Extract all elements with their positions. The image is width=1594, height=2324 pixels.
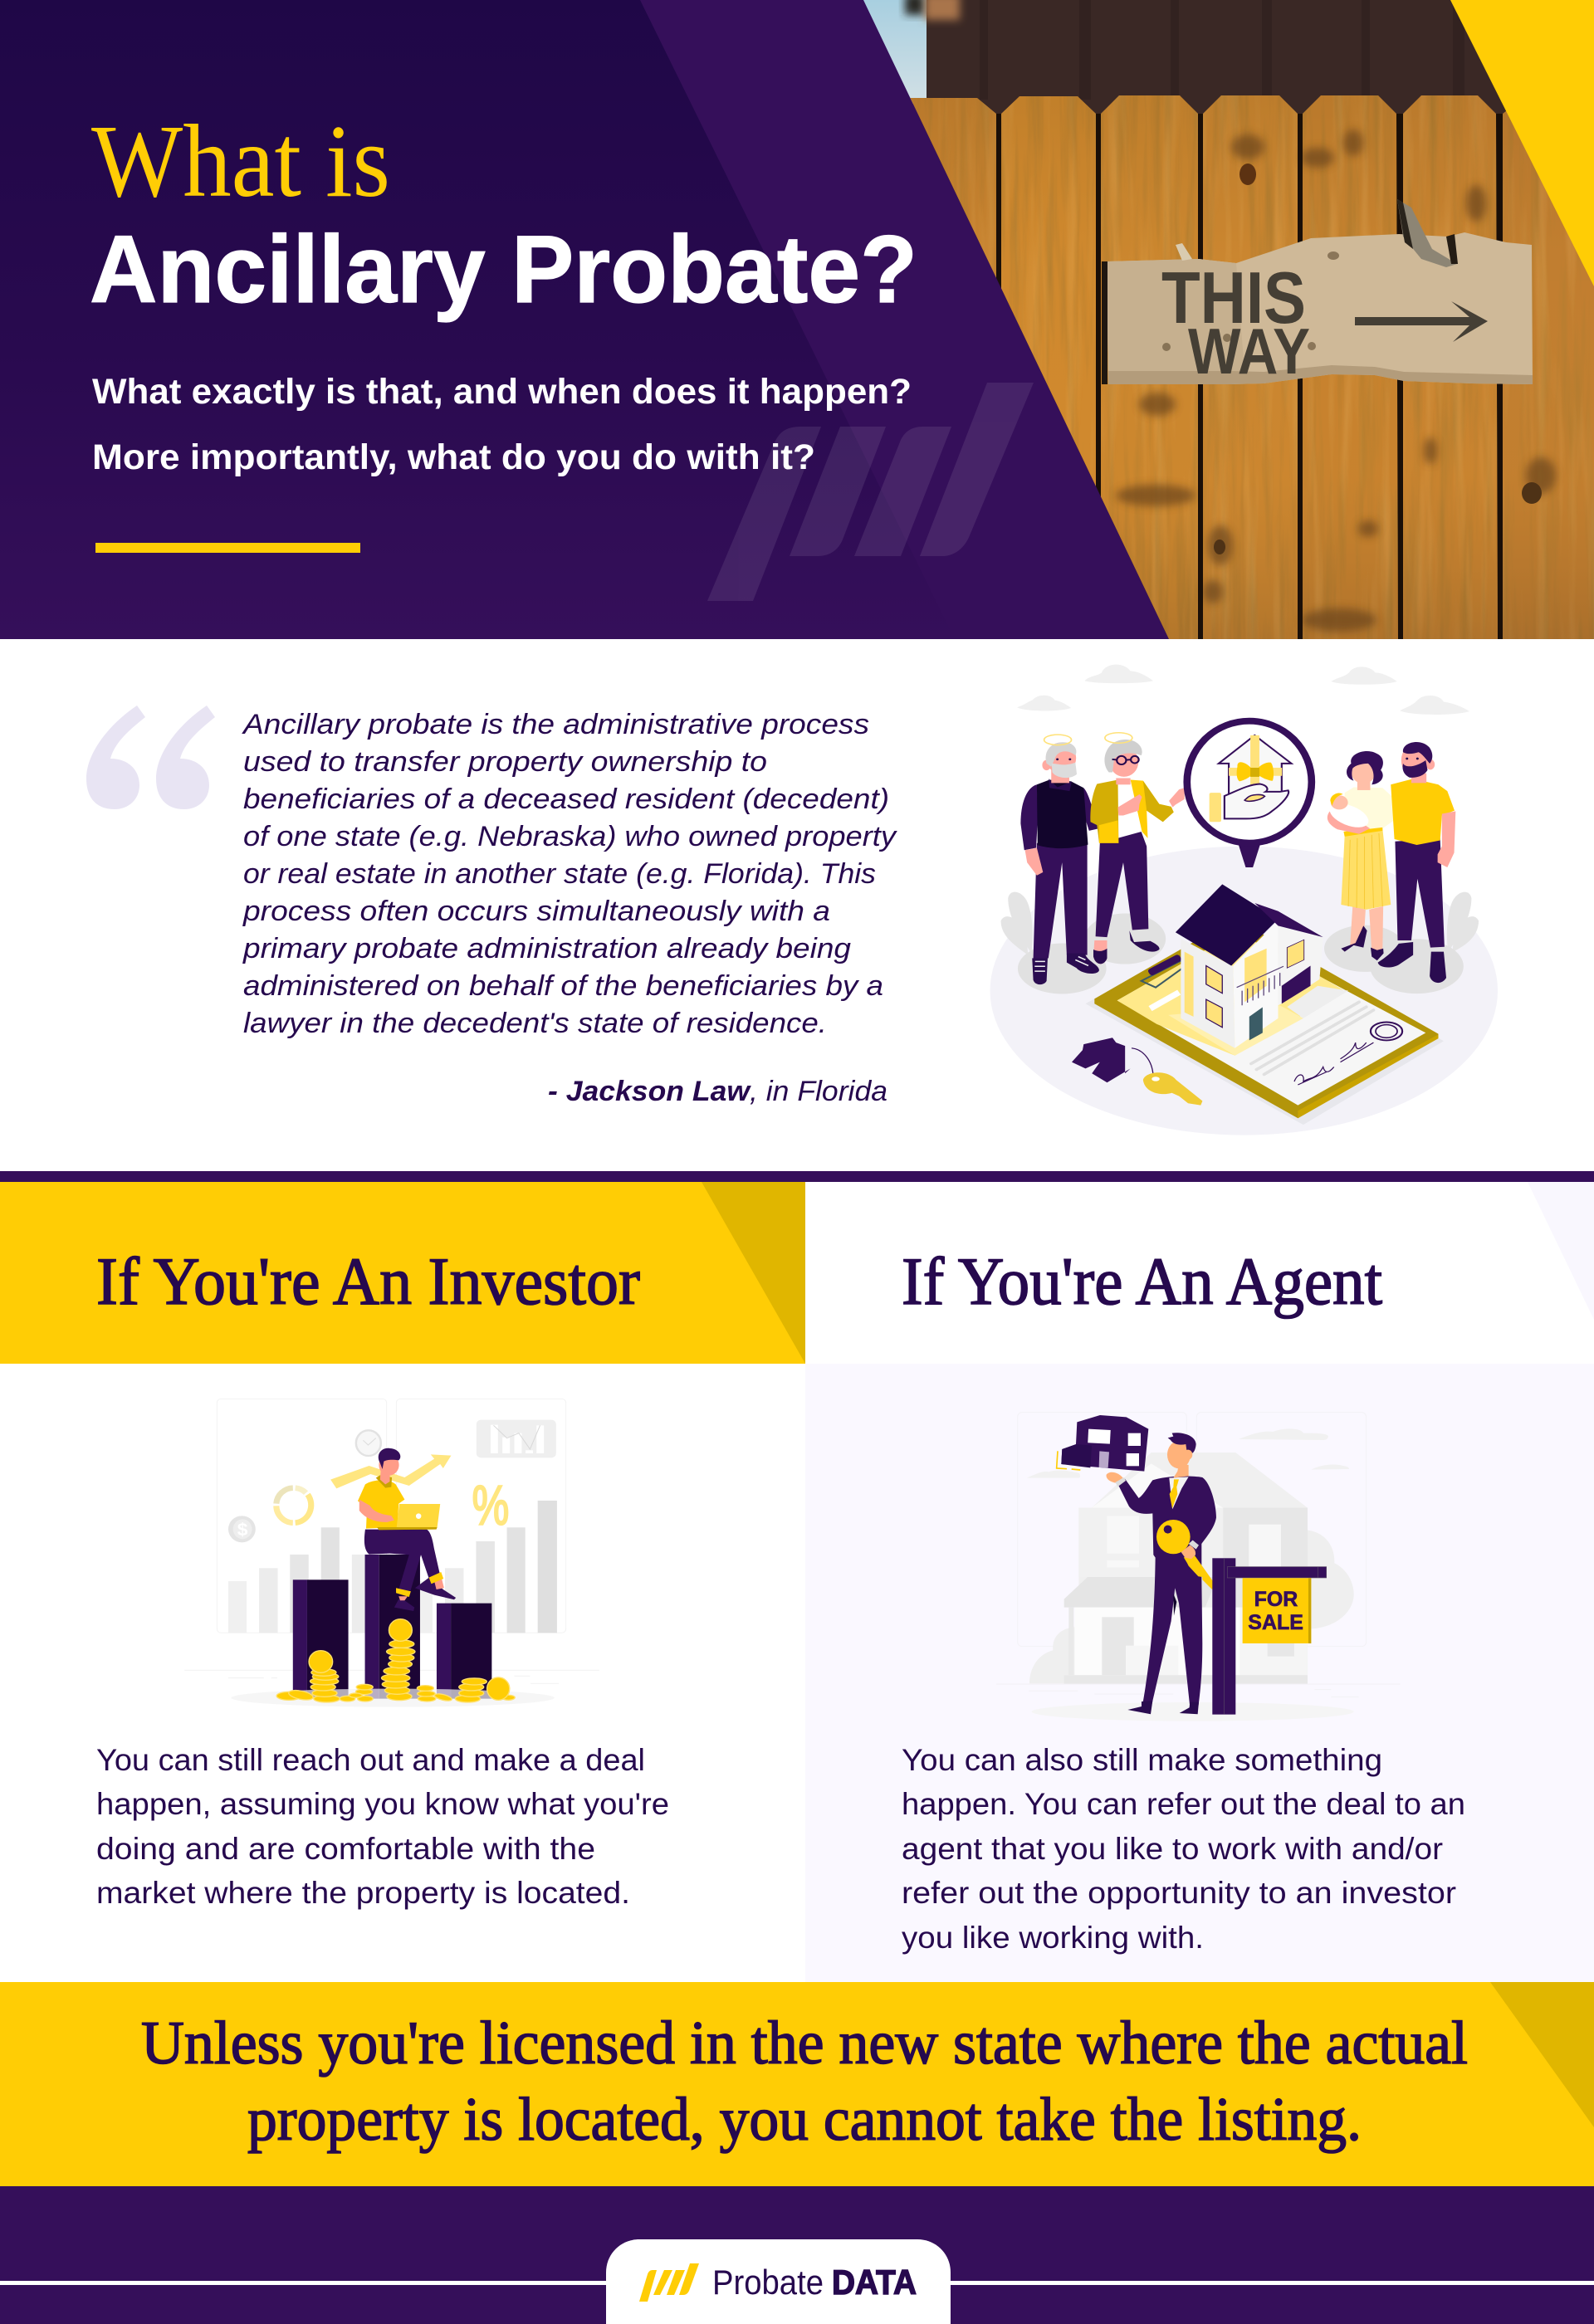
for sale board: FOR (1254, 1589, 1298, 1611)
illustration: agent with for sale sign (996, 1413, 1401, 1721)
agent panel background (805, 1364, 1594, 1982)
investor body text: doing and are comfortable with the (96, 1832, 595, 1866)
callout text (141, 2009, 1468, 2154)
clouds (1027, 1428, 1349, 1478)
background bushes (1029, 1530, 1354, 1683)
investor body text: market where the property is located. (96, 1876, 630, 1910)
illustration: investor on bar chart (184, 1399, 599, 1707)
logo wordmark: Probate (712, 2263, 824, 2302)
donut chart (276, 1488, 311, 1523)
title (90, 105, 917, 323)
subtitle: More importantly, what do you do with it? (92, 437, 815, 477)
chart cards (217, 1399, 566, 1633)
investor heading: If You're An Investor (96, 1243, 640, 1319)
subtitle (92, 372, 912, 477)
logo card (606, 2239, 951, 2324)
sign arrow (1355, 301, 1488, 342)
ground lines (184, 1670, 599, 1683)
investor body text: You can still reach out and make a deal (96, 1743, 645, 1777)
speech bubble with gift house icon (1187, 721, 1312, 867)
growth arrow (330, 1454, 451, 1488)
yellow accent bar (95, 543, 360, 553)
agent heading band (902, 1182, 1594, 1320)
panel: licensing callout (0, 1982, 1594, 2186)
agent body text (902, 1743, 1465, 1955)
callout text: property is located, you cannot take the listing. (247, 2086, 1362, 2154)
coin stacks (276, 1619, 515, 1702)
fence boards (880, 95, 1594, 639)
purple divider stripe (0, 1171, 1594, 1182)
wooden sign (1102, 199, 1533, 388)
quote text: of one state (e.g. Nebraska) who owned property (243, 821, 897, 852)
watermark logo (707, 383, 1034, 601)
wood knots (1116, 129, 1556, 632)
clipboard with property deed (1085, 918, 1444, 1125)
background house (1064, 1452, 1308, 1684)
for sale board (1243, 1578, 1311, 1643)
clock (356, 1430, 381, 1456)
agent heading: If You're An Agent (902, 1243, 1382, 1319)
base ellipse (990, 847, 1498, 1135)
yellow corner triangle (1450, 0, 1594, 286)
foot shadows (1018, 914, 1464, 994)
illustration: family with inherited house (990, 665, 1498, 1135)
figure: elderly man (1020, 735, 1099, 984)
subtitle: What exactly is that, and when does it happen? (92, 372, 912, 412)
logo mark (639, 2263, 699, 2302)
investor heading band (0, 1182, 805, 1364)
percent sign: % (472, 1474, 509, 1536)
logo (639, 2263, 917, 2302)
panel: hero (0, 0, 1594, 639)
floor shadow (232, 1689, 555, 1707)
quote text: administered on behalf of the beneficiaries by a (243, 970, 883, 1002)
icon: quotation mark (86, 706, 215, 809)
clouds (1017, 665, 1469, 715)
figure: father (1378, 742, 1455, 983)
quote text: beneficiaries of a deceased resident (decedent) (243, 784, 889, 815)
for sale sign post (1212, 1558, 1327, 1715)
agent body text: You can also still make something (902, 1743, 1382, 1777)
quote text: lawyer in the decedent's state of residence. (243, 1008, 827, 1039)
quote text: primary probate administration already being (242, 933, 851, 964)
investor body text: happen, assuming you know what you're (96, 1787, 669, 1821)
title line one: What is (91, 105, 390, 219)
investor body text (96, 1743, 669, 1910)
agent body text: agent that you like to work with and/or (902, 1832, 1443, 1866)
title line two: Ancillary Probate? (90, 217, 917, 323)
floating house (1057, 1415, 1148, 1472)
hero dark diagonal panel (0, 0, 955, 639)
column bars (293, 1555, 491, 1699)
panel: investor (0, 1182, 805, 1910)
plants (1001, 892, 1479, 955)
quote attribution: - Jackson Law , in Florida (548, 1076, 887, 1107)
hero base purple (0, 0, 1179, 639)
house model (1176, 884, 1323, 1048)
callout text: Unless you're licensed in the new state where the actual (141, 2009, 1468, 2077)
panel: quote (86, 665, 1498, 1135)
dollar coin (228, 1516, 256, 1542)
big key (1156, 1520, 1215, 1589)
quote text: or real estate in another state (e.g. Florida). This (243, 858, 876, 890)
figure: agent in suit (1107, 1433, 1216, 1714)
sign text: THIS (1161, 256, 1306, 339)
wooden sign: WAY (1188, 315, 1310, 388)
photo: wooden fence with sign (863, 0, 1594, 639)
agent body text: refer out the opportunity to an investor (902, 1876, 1456, 1910)
floor shadow (1032, 1702, 1354, 1721)
quote text (242, 709, 897, 1039)
agent body text: happen. You can refer out the deal to an (902, 1787, 1465, 1821)
figure: elderly woman (1090, 733, 1185, 964)
panel: agent (805, 1182, 1594, 1982)
logo: DATA (832, 2263, 917, 2302)
mini chart card (477, 1420, 556, 1457)
ground (996, 1684, 1401, 1697)
dollar coin: $ (237, 1520, 247, 1540)
figure: mother with baby (1326, 751, 1394, 960)
quote text: process often occurs simultaneously with a (242, 896, 830, 927)
background cards (1018, 1413, 1367, 1647)
quote text: used to transfer property ownership to (243, 746, 767, 778)
figure: investor with laptop (358, 1448, 456, 1611)
house keychain and key (1072, 1038, 1202, 1106)
background bars (228, 1501, 557, 1633)
quote text: Ancillary probate is the administrative process (242, 709, 869, 740)
for sale board: SALE (1248, 1612, 1303, 1634)
panel: footer (0, 2186, 1594, 2324)
agent body text: you like working with. (902, 1921, 1204, 1955)
